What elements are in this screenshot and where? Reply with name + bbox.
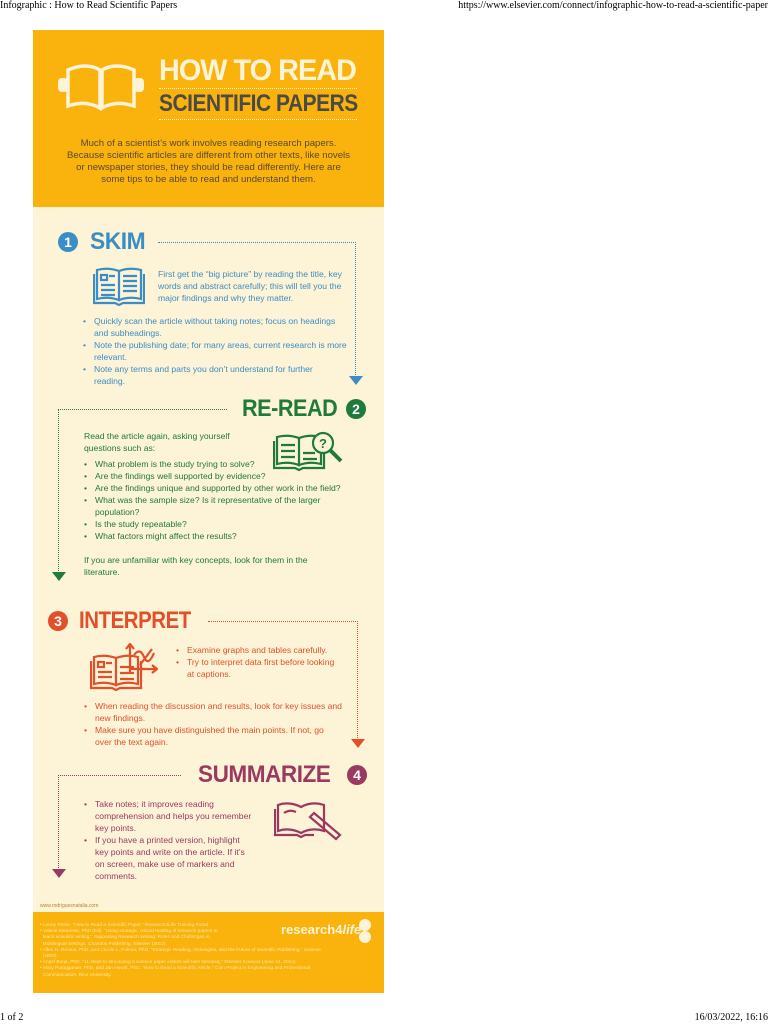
panel: re-read: What was the sample size? Is it representative of the larger [95, 495, 320, 505]
references: Multilingual Settings, Chandos Publishing, Elsevier (2012). [43, 942, 167, 947]
icon: book [93, 268, 145, 306]
intro text [67, 138, 350, 185]
panel: skim [58, 228, 363, 386]
panel: re-read: literature. [84, 567, 120, 577]
panel: re-read: What factors might affect the results? [95, 531, 237, 541]
browser header: Infographic : How to Read Scientific Papers [0, 0, 177, 11]
panel: footer references [33, 912, 384, 993]
panel: re-read: 2 [352, 401, 360, 417]
panel: re-read [52, 395, 366, 581]
intro text: Much of a scientist’s work involves reading research papers. [81, 138, 336, 149]
panel: re-read: Is the study repeatable? [95, 519, 187, 529]
panel: summarize: comments. [95, 871, 137, 881]
panel: skim: reading. [94, 376, 125, 386]
panel: summarize: key points. [95, 823, 136, 833]
panel: interpret: When reading the discussion and results, look for key issues and [95, 701, 342, 711]
text block: Read the article again, asking yourself [84, 431, 230, 441]
panel: skim: and subheadings. [94, 328, 162, 338]
panel: summarize: comprehension and helps you remember [95, 811, 251, 821]
text block: words and abstract carefully; this will tell you the [158, 281, 341, 291]
text block: First get the “big picture” by reading the title, key [158, 269, 342, 279]
panel: skim: Note the publishing date; for many areas, current research is more [94, 340, 347, 350]
arrow [158, 242, 356, 379]
references: teach scientific writing," Supporting Research Writing: Roles and Challenges in [43, 935, 210, 940]
text block [84, 431, 230, 453]
references: • Lonny Rhine, "How to Read a Scientific Paper," Research4Life Training Portal. [40, 923, 209, 928]
text block: major findings and why they matter. [158, 293, 293, 303]
arrow [58, 409, 227, 575]
icon: book with magnifier: ? [319, 436, 327, 451]
panel: skim: Note any terms and parts you don’t understand for further [94, 364, 313, 374]
panel: re-read: population? [95, 507, 139, 517]
panel: re-read: Are the findings well supported by evidence? [95, 471, 266, 481]
website credit: www.rodriguesnatalia.com [40, 903, 98, 909]
panel: interpret: Make sure you have distinguished the main points. If not, go [95, 725, 324, 735]
panel: header [33, 30, 384, 207]
panel: interpret: at captions. [187, 669, 231, 679]
intro text: or newspaper stories, they should be read differently. Here are [76, 162, 341, 173]
references [40, 922, 321, 978]
panel: interpret: over the text again. [95, 737, 168, 747]
panel: skim: Quickly scan the article without taking notes; focus on headings [94, 316, 335, 326]
heading [58, 232, 78, 252]
panel: summarize: 4 [353, 767, 361, 783]
references: • Valerie Matarese, PhD (Ed). "Using strategic, critical reading of research papers to [40, 929, 218, 934]
panel: skim: SKIM [90, 228, 145, 255]
icon: open book [58, 64, 144, 111]
references: (2009). [43, 954, 58, 959]
icon: book with magnifier [273, 432, 342, 471]
logo: research4life [281, 922, 361, 937]
panel: summarize: Take notes; it improves reading [95, 799, 214, 809]
panel: interpret: 3 [54, 613, 62, 629]
panel: summarize: key points and write on the article. If it’s [95, 847, 245, 857]
page footer: 1 of 2 [0, 1012, 23, 1023]
panel: summarize: SUMMARIZE [198, 761, 330, 788]
panel: interpret: Try to interpret data first before looking [187, 657, 334, 667]
references: • Angel Borja, PhD. "11 steps to structuring a science paper editors will take seriously," Elsevier Connect (June 24, 2014). [40, 960, 297, 965]
intro text: some tips to be able to read and understand them. [101, 174, 316, 185]
panel: skim: relevant. [94, 352, 127, 362]
intro text: Because scientific articles are different from other texts, like novels [67, 150, 350, 161]
heading: 1 [64, 234, 72, 250]
panel: interpret [48, 607, 365, 748]
panel: re-read: Are the findings unique and supported by other work in the field? [95, 483, 341, 493]
references: • Allen H. Renear, PhD, and Carole L. Palmer, PhD. "Strategic Reading, Ontologies, and the Future of Scientific Publishing," Science [40, 948, 321, 953]
panel: re-read: RE-READ [242, 395, 337, 422]
panel: re-read: What problem is the study trying to solve? [95, 459, 255, 469]
references: Communication, Rice University. [43, 973, 112, 978]
panel: summarize: on screen, make use of markers and [95, 859, 234, 869]
panel: interpret: INTERPRET [79, 607, 191, 634]
panel: interpret: Examine graphs and tables carefully. [187, 645, 327, 655]
references: • Mary Purugganan, PhD, and Jan Hewitt, PhD. "How to Read a Scientific Article," Cain Project in Engineering and Professional [40, 966, 310, 971]
icon: book with pencil [274, 802, 342, 840]
icon: book with chart [90, 643, 158, 691]
arrow [208, 621, 358, 742]
panel: interpret: new findings. [95, 713, 145, 723]
title: HOW TO READ [159, 54, 356, 87]
text block: questions such as: [84, 443, 155, 453]
panel: summarize: If you have a printed version, highlight [95, 835, 240, 845]
text block [158, 269, 342, 303]
infographic background [33, 30, 384, 993]
panel: summarize [52, 761, 367, 881]
text: https://www.elsevier.com/connect/infographic-how-to-read-a-scientific-paper [458, 0, 768, 11]
panel: re-read: If you are unfamiliar with key concepts, look for them in the [84, 555, 308, 565]
text: 16/03/2022, 16:16 [695, 1012, 768, 1023]
panel: header: SCIENTIFIC PAPERS [159, 90, 358, 117]
arrow [58, 775, 181, 872]
